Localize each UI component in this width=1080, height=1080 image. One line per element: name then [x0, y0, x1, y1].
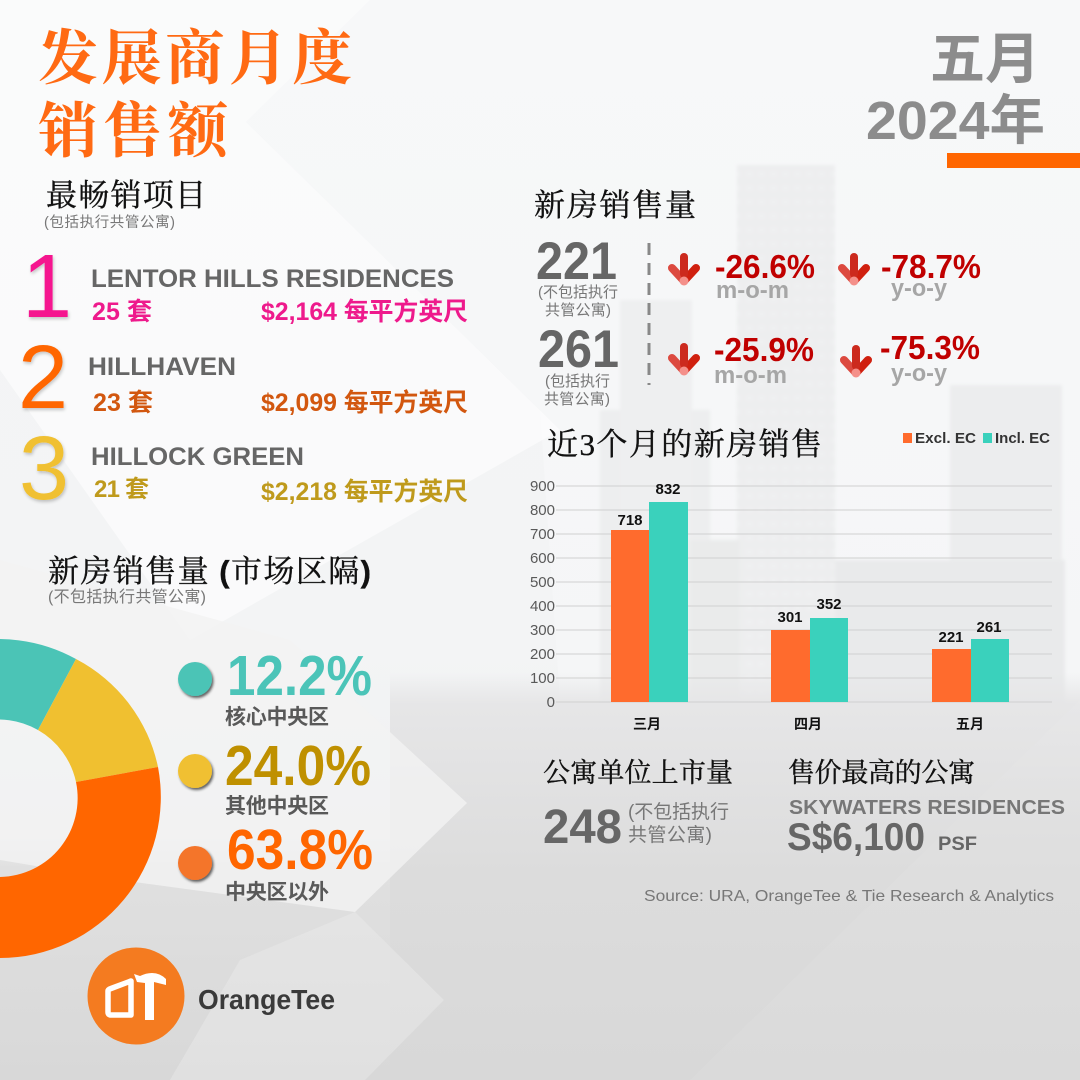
y axis labels: 600: [530, 550, 555, 567]
panel: units launched: 共管公寓): [628, 824, 712, 846]
rank 1 project: $2,164 每平方英尺: [261, 297, 468, 326]
rank 3 project: HILLOCK GREEN: [91, 443, 304, 471]
source: Source: URA, OrangeTee & Tie Research & Analytics: [644, 888, 1054, 905]
panel: best-selling projects: [18, 178, 468, 519]
heading: best-selling projects: 最畅销项目: [46, 178, 206, 213]
data labels: 221: [938, 629, 964, 646]
donut chart: [0, 639, 161, 958]
rank 3 project: 3: [19, 419, 69, 519]
data labels: 261: [976, 619, 1002, 636]
month labels: [633, 716, 984, 732]
figure: 221 excluding EC: [536, 232, 618, 319]
month labels: 三月: [633, 716, 661, 732]
note: excluding EC: (不包括执行共管公寓): [48, 588, 206, 606]
rank 3 project: $2,218 每平方英尺: [261, 477, 468, 506]
change figures: -75.3%: [880, 329, 980, 366]
y axis labels: 200: [530, 646, 555, 663]
month labels: 四月: [794, 716, 822, 732]
logo: OrangeTee: [88, 948, 335, 1044]
heading: chart: 近3个月的新房销售: [547, 427, 822, 462]
legend: [903, 431, 1051, 447]
rank 1 project: 25 套: [92, 298, 152, 326]
panel: units launched: 248: [543, 801, 622, 854]
heading: new home sales: 新房销售量: [534, 188, 696, 223]
y axis labels: 900: [530, 478, 555, 495]
data labels: 718: [617, 512, 643, 529]
change figures: -26.6%: [715, 248, 815, 285]
panel: highest priced condo: PSF: [938, 834, 977, 855]
legend: outside central region: 中央区以外: [225, 881, 329, 904]
panel: units launched: (不包括执行: [628, 801, 729, 823]
panel: highest priced condo: SKYWATERS RESIDENCES: [789, 796, 1065, 819]
y axis labels: 400: [530, 598, 555, 615]
legend: core central region: [178, 644, 372, 729]
y axis labels: 100: [530, 670, 555, 687]
rank 2 project: $2,099 每平方英尺: [261, 388, 468, 417]
data labels: 301: [777, 609, 803, 626]
legend: outside central region: [178, 818, 373, 904]
figure: 221 excluding EC: (不包括执行: [538, 284, 618, 301]
rank 2 project: HILLHAVEN: [88, 353, 236, 381]
rank 1 project: 1: [22, 237, 72, 337]
data labels: 352: [816, 596, 842, 613]
data labels: 832: [655, 481, 681, 498]
panel: units launched: [543, 758, 733, 854]
panel: highest priced condo: S$6,100: [787, 816, 925, 859]
figure: 261 including EC: [538, 320, 619, 408]
y axis labels: 500: [530, 574, 555, 591]
month labels: 五月: [956, 716, 984, 732]
y axis labels: [530, 478, 555, 711]
change figures: m-o-m: [716, 277, 789, 304]
y axis labels: 0: [547, 694, 555, 711]
legend: outside central region: 63.8%: [227, 818, 373, 882]
figure: 261 including EC: (包括执行: [545, 373, 610, 390]
legend: rest of central region: [178, 734, 371, 818]
legend: rest of central region: 24.0%: [225, 734, 371, 798]
panel: units launched: 公寓单位上市量: [543, 758, 733, 788]
panel: new home sales figures: [534, 188, 981, 408]
icon: down arrow 4: [844, 349, 868, 378]
figure: 261 including EC: 261: [538, 320, 619, 379]
panel: new home sales by market segment: [0, 554, 373, 958]
data labels: [617, 481, 1002, 646]
date: month and year: [866, 28, 1080, 168]
y axis labels: 800: [530, 502, 555, 519]
change figures: m-o-m: [714, 362, 787, 389]
date: month and year: 五月: [930, 28, 1040, 90]
panel: highest priced condo: 售价最高的公寓: [788, 758, 975, 788]
rank 1 project: LENTOR HILLS RESIDENCES: [91, 265, 454, 293]
figure: 221 excluding EC: 221: [536, 232, 617, 291]
legend: core central region: 核心中央区: [225, 705, 329, 729]
legend: Incl. EC: [995, 431, 1051, 447]
bars: [611, 502, 1009, 702]
figure: 261 including EC: 共管公寓): [544, 390, 610, 408]
rank 2 project: 23 套: [93, 389, 153, 417]
legend: core central region: 12.2%: [227, 644, 372, 708]
note: including EC: (包括执行共管公寓): [44, 213, 175, 231]
y axis labels: 300: [530, 622, 555, 639]
rank 2 project: 2: [18, 328, 68, 428]
figure: 221 excluding EC: 共管公寓): [545, 301, 611, 319]
change figures: -25.9%: [714, 331, 814, 368]
legend: rest of central region: 其他中央区: [225, 795, 329, 818]
rank 2 project: [18, 328, 468, 428]
change figures: y-o-y: [891, 275, 948, 302]
logo: OrangeTee: OrangeTee: [198, 984, 335, 1015]
panel: highest priced condo: [787, 758, 1065, 859]
title: 销售额: [38, 99, 231, 165]
icon: down arrow 2: [842, 257, 866, 286]
heading: market segment: 新房销售量 (市场区隔): [48, 554, 371, 589]
rank 1 project: [22, 237, 468, 337]
icon: down arrow 1: [672, 257, 696, 286]
rank 3 project: 21 套: [94, 476, 149, 503]
date: month and year: 2024年: [866, 91, 1045, 151]
rank 3 project: [19, 419, 468, 519]
change figures: -78.7%: [881, 248, 981, 285]
icon: down arrow 3: [672, 347, 696, 376]
y axis labels: 700: [530, 526, 555, 543]
change figures: y-o-y: [891, 360, 948, 387]
title: [38, 26, 352, 165]
title: 发展商月度: [38, 26, 352, 92]
legend: Excl. EC: [915, 431, 977, 447]
change figures: [714, 248, 981, 389]
bar chart: new home sales in last 3 months: [530, 427, 1052, 732]
